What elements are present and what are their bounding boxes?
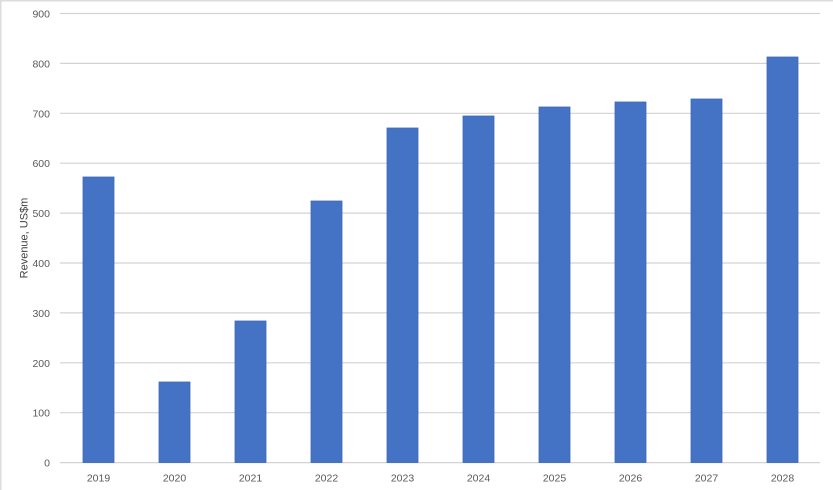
x-axis labels: 2019 bbox=[87, 472, 110, 484]
x-axis labels bbox=[87, 472, 794, 484]
y-axis labels: 500 bbox=[32, 208, 50, 220]
x-axis labels: 2022 bbox=[315, 472, 338, 484]
y-axis labels: 300 bbox=[32, 308, 50, 320]
y-axis labels: 200 bbox=[32, 358, 50, 370]
x-axis labels: 2028 bbox=[771, 472, 794, 484]
x-axis labels: 2021 bbox=[239, 472, 262, 484]
x-axis labels: 2026 bbox=[619, 472, 642, 484]
x-axis labels: 2027 bbox=[695, 472, 718, 484]
y-axis labels: 900 bbox=[32, 8, 50, 20]
x-axis labels: 2025 bbox=[543, 472, 566, 484]
y-axis labels: 600 bbox=[32, 158, 50, 170]
y-axis labels: 400 bbox=[32, 258, 50, 270]
y-axis labels: 100 bbox=[32, 408, 50, 420]
y-axis labels: 800 bbox=[32, 58, 50, 70]
y-axis labels bbox=[32, 8, 50, 470]
y-axis labels: 0 bbox=[44, 458, 50, 470]
x-axis labels: 2024 bbox=[467, 472, 490, 484]
y-axis title: Revenue, US$m bbox=[18, 198, 30, 278]
x-axis labels: 2020 bbox=[163, 472, 186, 484]
y-axis labels: 700 bbox=[32, 108, 50, 120]
bars bbox=[83, 57, 798, 462]
x-axis labels: 2023 bbox=[391, 472, 414, 484]
